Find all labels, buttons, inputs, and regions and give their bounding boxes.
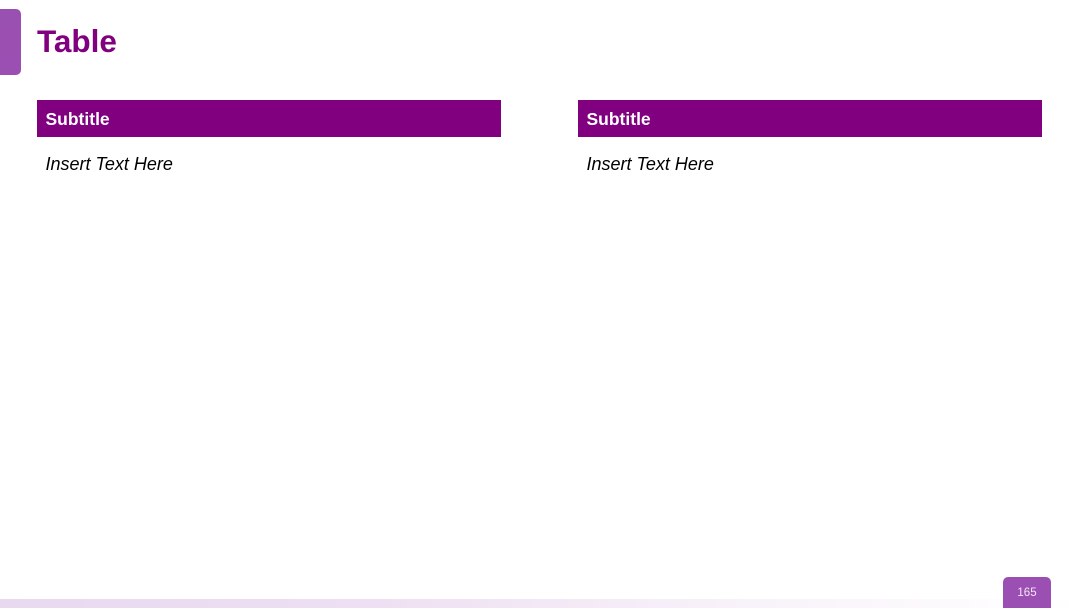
right subtitle bar (578, 100, 1042, 137)
left body text: Insert Text Here (46, 154, 173, 174)
footer gradient strip (0, 599, 1080, 608)
right body text: Insert Text Here (586, 154, 714, 174)
page number badge: 165 (1017, 587, 1037, 599)
accent tab (0, 9, 21, 75)
left subtitle bar: Subtitle (46, 109, 110, 129)
title: Table (37, 23, 117, 59)
right subtitle bar: Subtitle (586, 109, 651, 129)
left subtitle bar (37, 100, 501, 137)
page number badge (1003, 577, 1051, 608)
